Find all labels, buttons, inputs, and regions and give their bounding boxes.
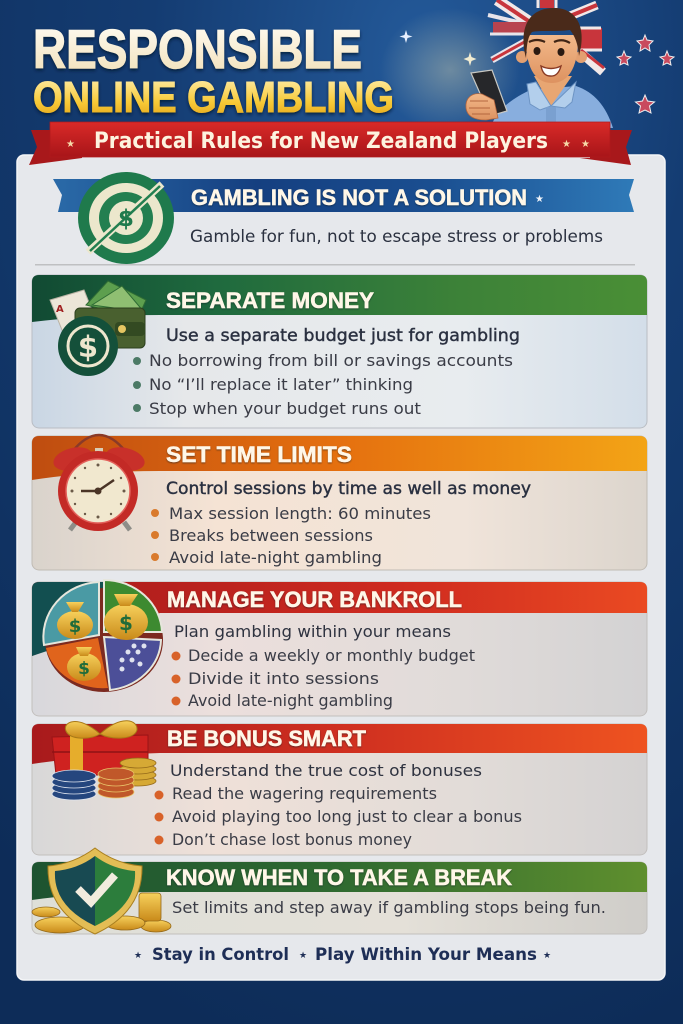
footer tagline: Stay in Control [152,945,289,964]
ribbon subtitle: ★ [562,139,571,150]
bullet list: Don’t chase lost bonus money [172,830,412,849]
heading: BE BONUS SMART [167,726,367,751]
banner [53,179,634,212]
bullet list: Avoid playing too long just to clear a bonus [172,807,522,826]
icon: gift box with chips and coins [52,721,156,800]
icon: pie chart with money bags: $ [78,659,90,679]
bullet list: Read the wagering requirements [172,784,437,803]
panel: separate money [32,275,647,428]
bullet list: Stop when your budget runs out [149,399,421,418]
header [32,275,647,322]
icon: target with dollar: $ [118,206,134,232]
bullet list: Avoid late-night gambling [188,691,393,710]
bullet list: Decide a weekly or monthly budget [188,646,475,665]
icon: wallet, card and money: $ [78,330,98,364]
bullet list [151,504,431,567]
footer tagline: ★ [134,951,142,961]
bullet list: Divide it into sessions [188,669,379,688]
panel: know when to take a break [32,848,647,934]
footer tagline: Play Within Your Means [315,945,537,964]
header [32,724,647,764]
footer tagline: ★ [543,951,551,961]
text block: Understand the true cost of bonuses [170,761,482,780]
title [33,18,394,122]
title: ONLINE GAMBLING [33,73,394,122]
ribbon subtitle: ★ [581,139,590,150]
icon: alarm clock [51,435,147,531]
bullet list [133,351,513,418]
section: gambling is not a solution [53,172,634,264]
icon: pie chart with money bags [43,580,163,692]
heading: SEPARATE MONEY [166,288,374,313]
text block: Set limits and step away if gambling stops being fun. [172,898,606,917]
icon: pie chart with money bags: $ [119,611,133,635]
NZ flag and stars [400,0,674,113]
icon: wallet, card and money [50,281,146,376]
ribbon subtitle: ★ [66,139,75,150]
footer tagline: ★ [299,951,307,961]
title: RESPONSIBLE [33,18,362,80]
text: Gamble for fun, not to escape stress or problems [190,227,603,247]
bullet list [154,784,522,849]
bullet list [172,646,475,710]
bullet list: Max session length: 60 minutes [169,504,431,523]
panel: be bonus smart [32,721,647,855]
header [32,436,647,480]
bullet list: Avoid late-night gambling [169,548,382,567]
icon: target with dollar [78,172,174,264]
header [32,862,647,900]
icon: shield with check and coins [32,848,171,934]
heading: GAMBLING IS NOT A SOLUTION [191,185,527,210]
section: gambling is not a solution: ★ [535,194,544,205]
man holding phone illustration [466,8,613,128]
panel: set time limits [32,435,647,570]
bullet list: No borrowing from bill or savings accounts [149,351,513,370]
icon: wallet, card and money: A [56,304,64,315]
heading: KNOW WHEN TO TAKE A BREAK [166,865,512,890]
text block: Plan gambling within your means [174,622,451,641]
ribbon subtitle: Practical Rules for New Zealand Players [94,128,548,154]
bullet list: No “I’ll replace it later” thinking [149,375,413,394]
heading: MANAGE YOUR BANKROLL [167,587,462,612]
bullet list: Breaks between sessions [169,526,373,545]
ribbon subtitle [29,122,632,165]
header [32,582,647,656]
text block: Control sessions by time as well as money [166,479,531,498]
footer tagline [134,945,551,964]
panel: manage your bankroll [32,580,647,716]
heading: SET TIME LIMITS [166,442,352,467]
main panel [17,155,665,980]
text block: Use a separate budget just for gambling [166,326,520,345]
icon: pie chart with money bags: $ [69,616,81,637]
